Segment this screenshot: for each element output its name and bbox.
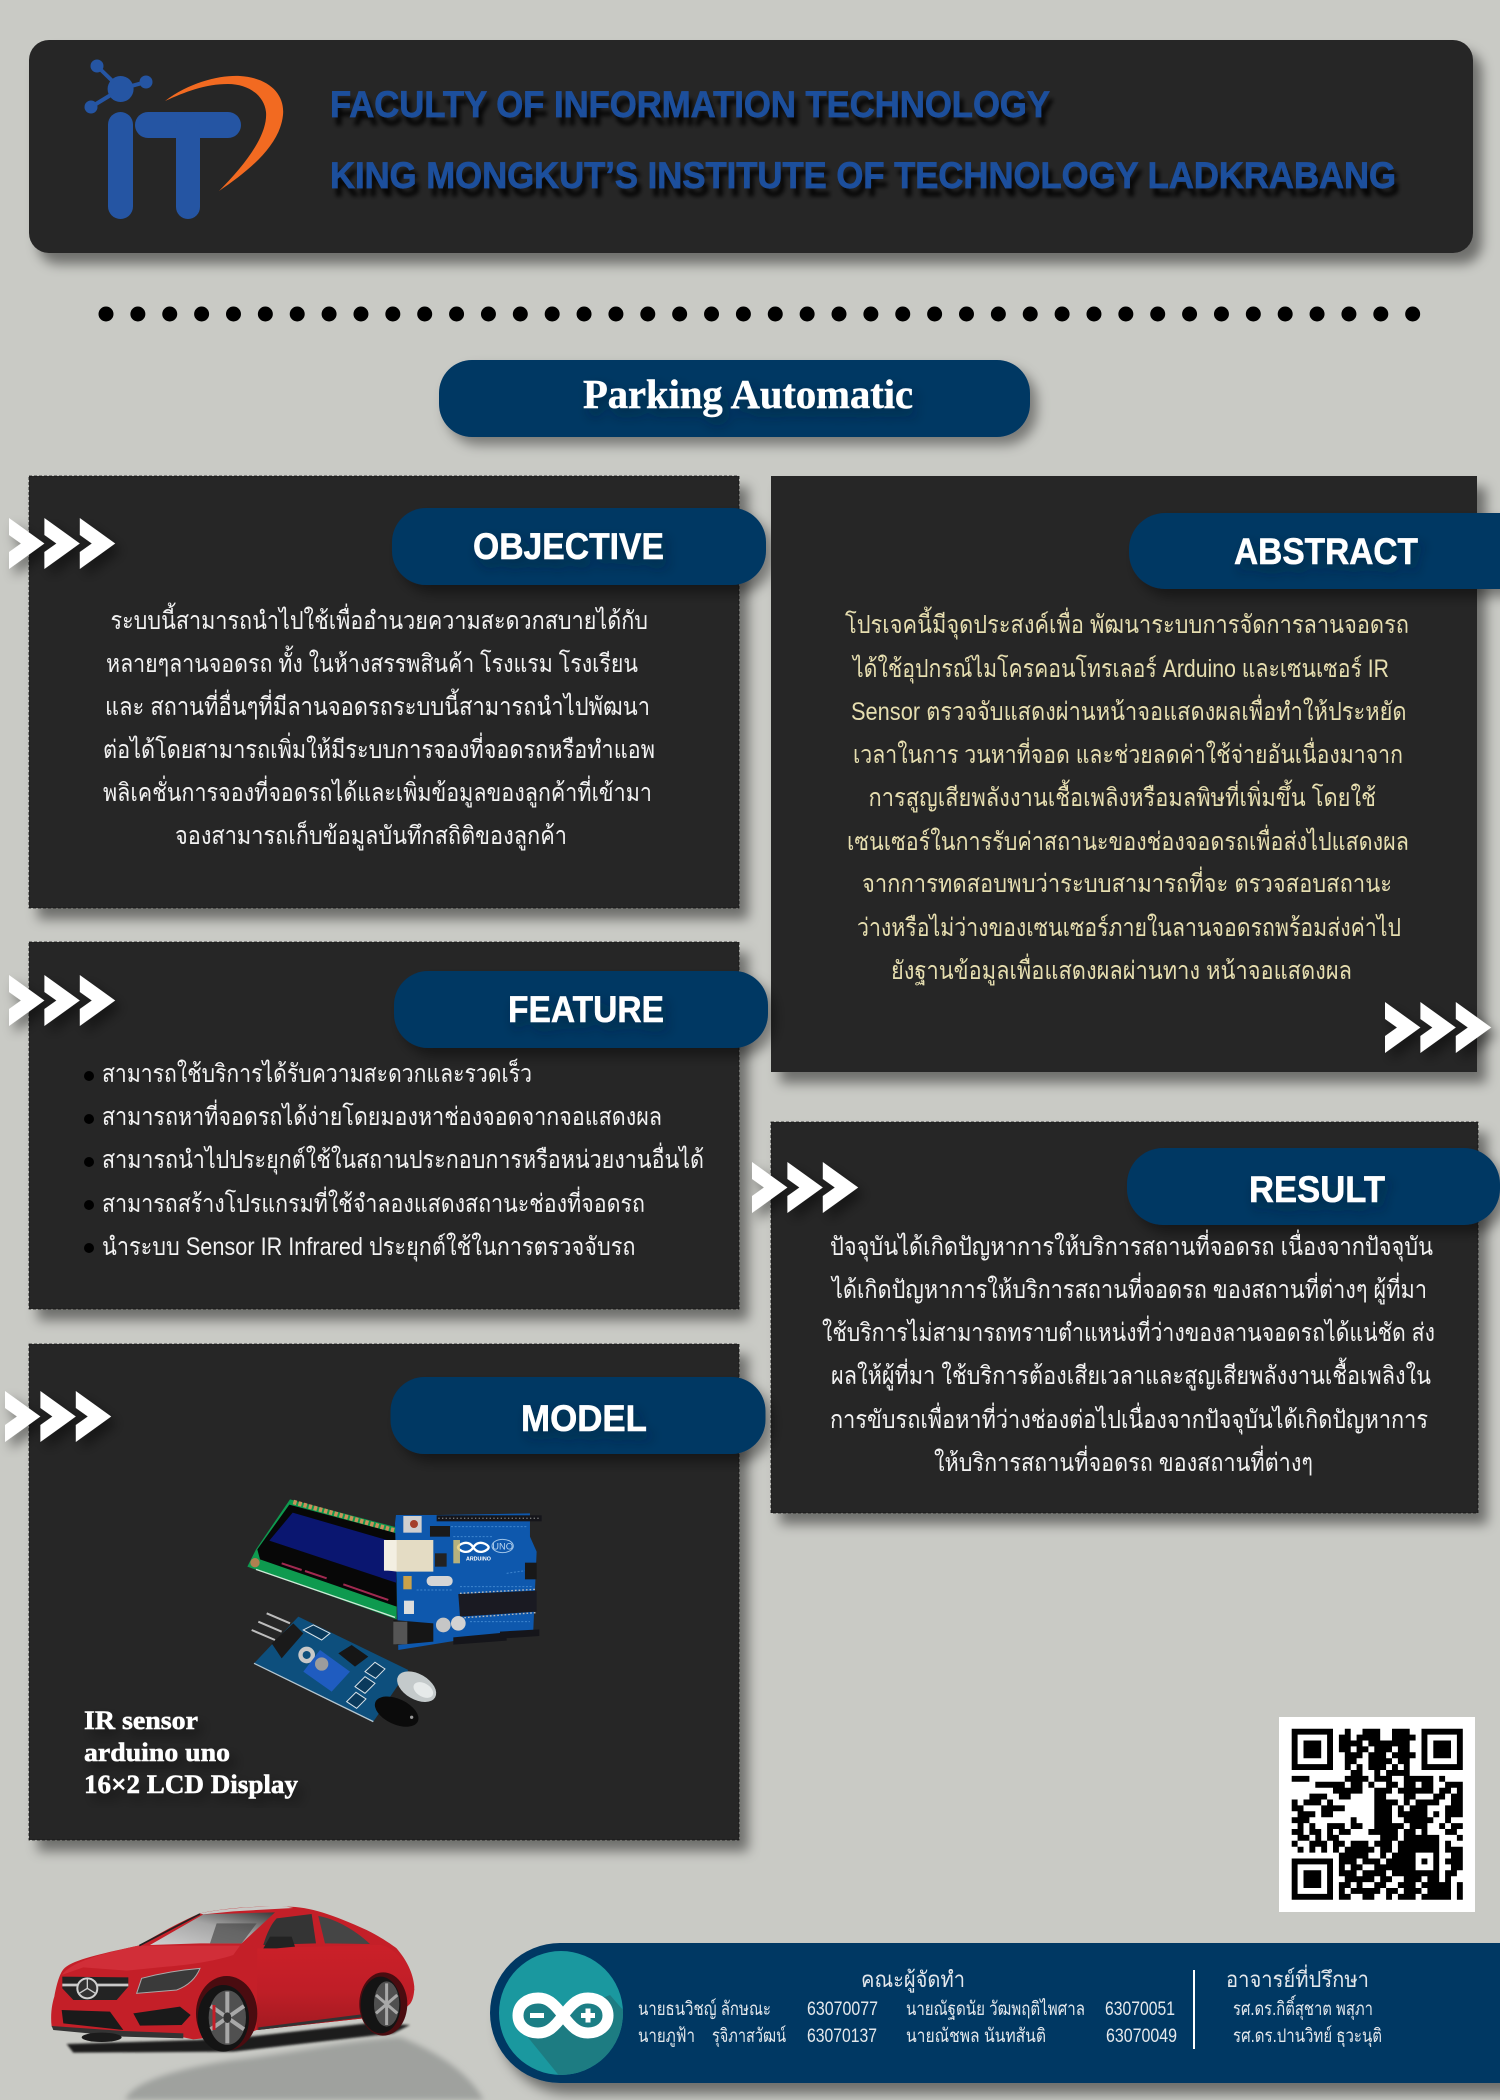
table: team members: 63070077 [807,1999,878,2020]
panel: abstract [771,476,1500,1072]
heading pill: abstract: ABSTRACT [1234,531,1418,572]
heading: faculty name: FACULTY OF INFORMATION TECHNOLOGY [330,84,1050,125]
footer banner [490,1943,1500,2083]
front wheel [196,1976,257,2052]
arrow: chevrons [5,1391,111,1442]
heading pill: objective [392,508,766,585]
side skirt [258,2014,362,2030]
A-pillar [139,1914,200,1946]
footer shadow blob [125,2037,484,2100]
front splitter [52,2026,183,2038]
text: objective body: ระบบนี้สามารถนำไปใช้เพื่ออำนวยความสะดวกสบายได้กับ [110,602,648,635]
panel: model [5,1344,766,1840]
Arduino board [384,1513,542,1650]
list: advisors: รศ.ดร.ปานวิทย์ ธุวะนุติ [1233,2025,1382,2048]
headlight [137,1968,200,1993]
heading: advisors: อาจารย์ที่ปรึกษา [1226,1964,1369,1992]
roof highlight [200,1907,293,1914]
illustration: LCD, Arduino and IR sensor [247,1499,542,1733]
side windows [263,1914,316,1945]
list: features: สามารถหาที่จอดรถได้ง่ายโดยมองหาช่องจอดจากจอแสดงผล [102,1099,662,1131]
list: features [84,1058,704,1262]
caption: components: 16×2 LCD Display [84,1770,298,1799]
table: team members: รุจิภาสวัฒน์ [712,2025,786,2048]
table: team members: นายณัชพล นันทสันติ [906,2026,1046,2047]
table: team members: นายธนวิชญ์ ลักษณะ [638,1998,771,2020]
QR code [1279,1717,1475,1912]
text: objective body: จองสามารถเก็บข้อมูลบันทึกสถิติของลูกค้า [175,820,567,851]
text: abstract body: ยังฐานข้อมูลเพื่อแสดงผลผ่านทาง หน้าจอแสดงผล [891,953,1352,986]
list: features: สามารถใช้บริการได้รับความสะดวกและรวดเร็ว [102,1058,532,1088]
text: result body: การขับรถเพื่อหาที่ว่างช่องต่อไปเนื่องจากปัจจุบันได้เกิดปัญหาการ [830,1402,1428,1435]
door panels [257,1945,414,2030]
heading pill: objective: OBJECTIVE [473,526,664,567]
heading pill: feature: FEATURE [508,989,664,1030]
air intakes [62,2010,123,2030]
rear wheel [359,1972,407,2036]
hood [62,1946,240,1975]
panel: objective [9,476,766,908]
header banner [29,40,1473,253]
text: abstract body: การสูญเสียพลังงานเชื้อเพลิงหรือมลพิษที่เพิ่มขึ้น โดยใช้ [868,779,1376,813]
text: abstract body [845,606,1409,986]
caption: components [84,1706,298,1799]
list: advisors [1233,1994,1382,2048]
windshield [150,1912,275,1945]
text: abstract body: ได้ใช้อุปกรณ์ไมโครคอนโทรเลอร์ Arduino และเซนเซอร์ IR [851,654,1389,684]
heading pill: model: MODEL [521,1398,647,1439]
text: abstract body: จากการทดสอบพบว่าระบบสามารถที่จะ ตรวจสอบสถานะ [862,866,1392,898]
heading pill: result: RESULT [1249,1169,1385,1210]
table: team members: นายภูฟ้า [638,2026,695,2047]
LCD module [247,1499,397,1619]
arrow: chevrons [752,1162,858,1213]
text: abstract body: เซนเซอร์ในการรับค่าสถานะของช่องจอดรถเพื่อส่งไปแสดงผล [847,824,1409,856]
illustration: red car [51,1907,414,2053]
title text: Parking Automatic [583,371,913,417]
text: objective body: ต่อได้โดยสามารถเพิ่มให้มีระบบการจองที่จอดรถหรือทำแอพ [103,732,655,764]
arrow: chevrons [9,518,115,569]
table: team members [638,1998,1177,2048]
text: abstract body: โปรเจคนี้มีจุดประสงค์เพื่อ พัฒนาระบบการจัดการลานจอดรถ [845,606,1409,640]
list: features: สามารถนำไปประยุกต์ใช้ในสถานประกอบการหรือหน่วยงานอื่นได้ [102,1142,704,1175]
heading pill: result [1127,1148,1500,1225]
heading pill: feature [394,971,768,1048]
grille [62,1977,128,2000]
table: team members: นายณัฐดนัย วัฒพฤติไพศาล [906,1998,1085,2020]
icon: Arduino logo [499,1951,630,2078]
heading pill: abstract [1129,513,1500,589]
table: team members: 63070051 [1105,1999,1175,2020]
text: objective body: หลายๆลานจอดรถ ทั้ง ในห้างสรรพสินค้า โรงแรม โรงเรียน [106,645,638,678]
text: objective body: พลิเคชั่นการจองที่จอดรถได้และเพิ่มข้อมูลของลูกค้าที่เข้ามา [103,775,652,808]
caption: components: IR sensor [84,1706,198,1735]
car body [51,1907,414,2039]
IR sensor [252,1613,441,1733]
list: advisors: รศ.ดร.กิติ์สุชาต พสุภา [1233,1994,1373,2021]
text: abstract body: เวลาในการ วนหาที่จอด และช่วยลดค่าใช้จ่ายอันเนื่องมาจาก [853,737,1403,769]
arrow: chevrons [1385,1002,1491,1053]
caption: components: arduino uno [84,1738,230,1767]
list: features: สามารถสร้างโปรแกรมที่ใช้จำลองแสดงสถานะช่องที่จอดรถ [102,1186,645,1218]
ground shadow [67,2023,410,2053]
Arduino board: ARDUINO [466,1557,491,1563]
panel: result [752,1122,1500,1513]
heading pill: model [390,1377,766,1454]
dotted divider [106,306,1414,322]
icon: IT logo [84,60,283,219]
text: result body: ให้บริการสถานที่จอดรถ ของสถานที่ต่างๆ [934,1445,1313,1477]
text: abstract body: ว่างหรือไม่ว่างของเซนเซอร์ภายในลานจอดรถพร้อมส่งค่าไป [857,913,1401,942]
heading: organizers: คณะผู้จัดทำ [861,1967,965,1993]
far front tire [82,2033,122,2042]
text: objective body: และ สถานที่อื่นๆที่มีลานจอดรถระบบนี้สามารถนำไปพัฒนา [105,688,650,721]
header background [29,40,1473,253]
divider: footer column [1193,1970,1195,2049]
text: result body [822,1229,1435,1477]
table: team members: 63070049 [1106,2026,1177,2047]
list: features: นำระบบ Sensor IR Infrared ประยุกต์ใช้ในการตรวจจับรถ [102,1232,636,1262]
title pill [439,360,1030,437]
mirror [263,1937,295,1948]
table: team members: 63070137 [807,2026,877,2047]
Arduino board: UNO [492,1541,513,1551]
text: result body: ได้เกิดปัญหาการให้บริการสถานที่จอดรถ ของสถานที่ต่างๆ ผู้ที่มา [830,1272,1427,1305]
heading: institute name: KING MONGKUT’S INSTITUTE OF TECHNOLOGY LADKRABANG [330,155,1396,196]
arrow: chevrons [9,975,115,1026]
panel: feature [9,942,768,1309]
text: objective body [103,602,655,851]
text: abstract body: Sensor ตรวจจับแสดงผ่านหน้าจอแสดงผลเพื่อทำให้ประหยัด [851,694,1406,726]
